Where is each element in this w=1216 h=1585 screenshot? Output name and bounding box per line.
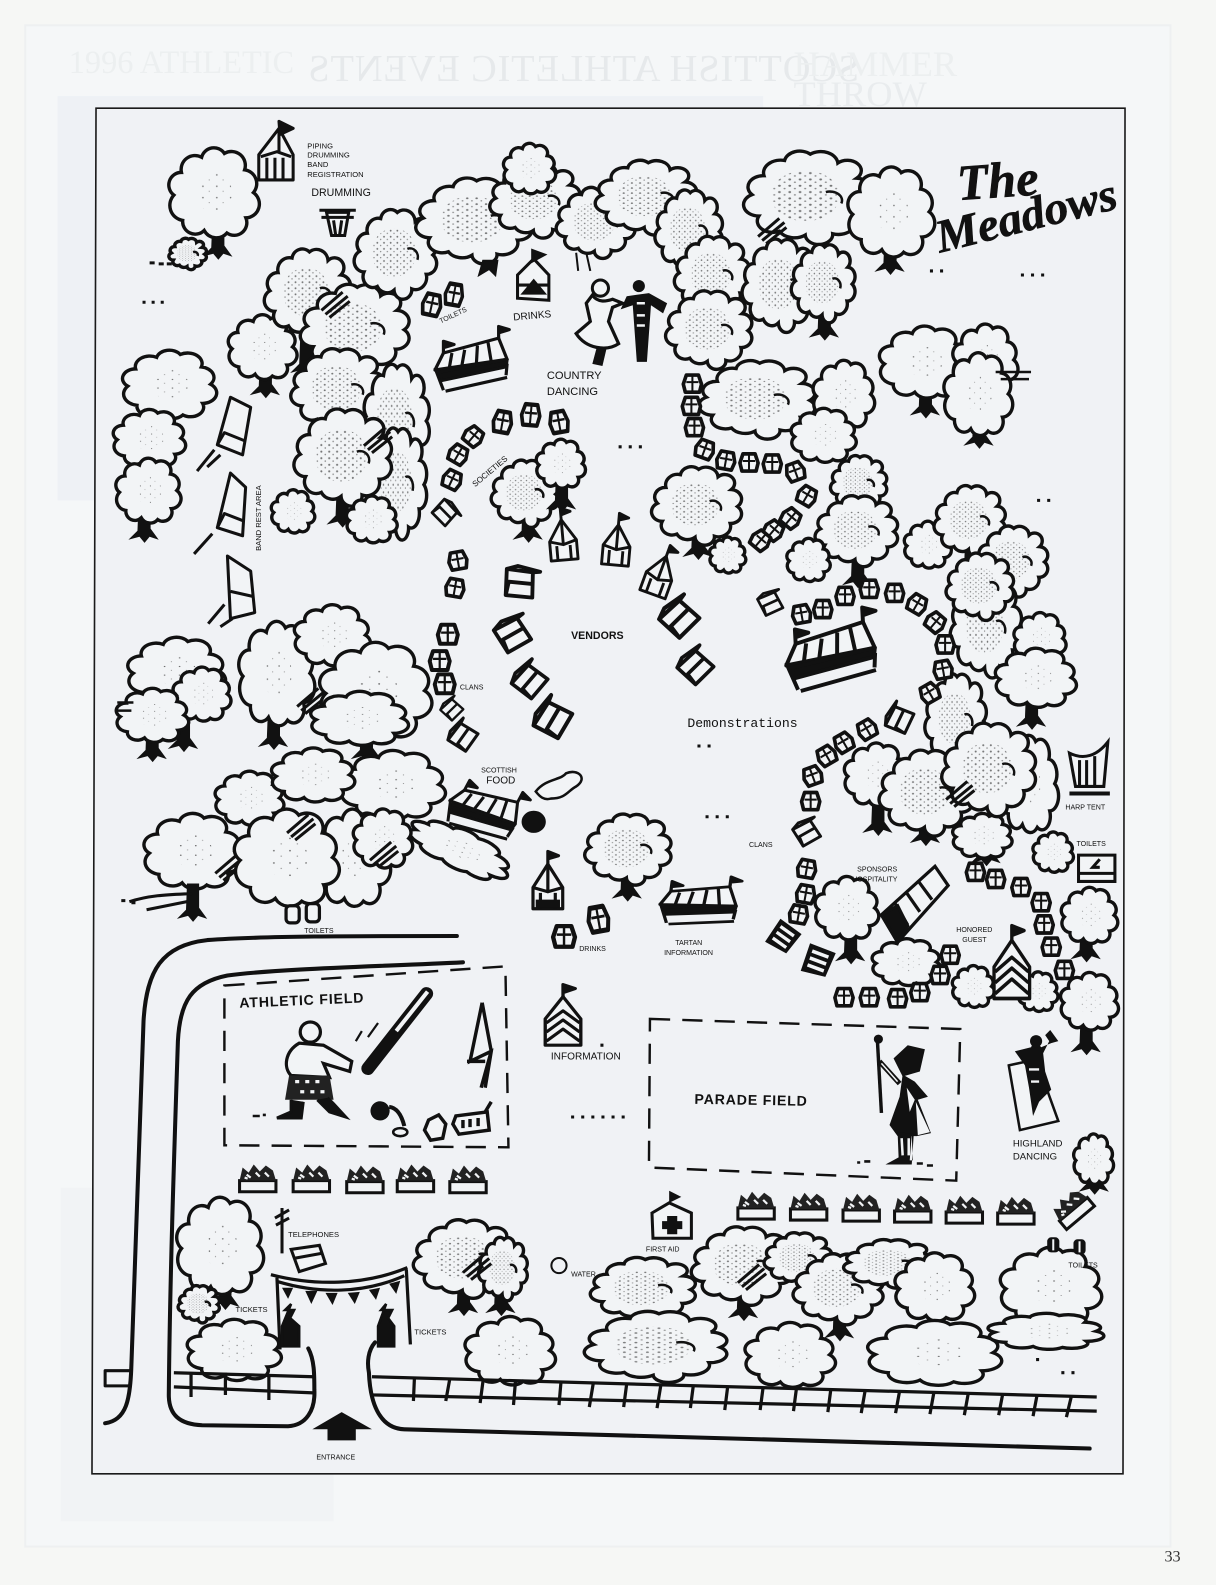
figure: piper — [857, 1035, 933, 1165]
labels: BAND REST AREA — [254, 484, 263, 551]
labels: INFORMATION — [551, 1051, 621, 1062]
labels: PIPING — [307, 142, 333, 151]
labels: DRINKS — [579, 946, 606, 953]
booths: clans west — [430, 625, 482, 756]
trees: north-west — [143, 148, 259, 302]
parade field boundary — [649, 1019, 960, 1181]
booths: north-east arc — [682, 375, 819, 553]
ticket booth: left — [282, 1304, 299, 1346]
booths: inner arc — [757, 580, 954, 810]
labels: ENTRANCE — [316, 1455, 356, 1462]
labels: ATHLETIC FIELD — [239, 989, 365, 1011]
labels: TICKETS — [414, 1327, 446, 1336]
show-through heading: reversed print: HAMMER — [793, 44, 958, 84]
map title: The — [955, 150, 1040, 211]
vendor tents — [493, 507, 717, 745]
tent: east stage — [783, 607, 879, 692]
tent: drinks south — [533, 851, 610, 947]
labels: HIGHLAND — [1013, 1138, 1062, 1149]
map title: Meadows — [929, 169, 1122, 264]
fence — [174, 1373, 1097, 1417]
trees: south-west cluster — [116, 605, 518, 922]
labels: Demonstrations — [687, 716, 798, 731]
food stands: west row — [240, 1164, 486, 1193]
labels: DANCING — [547, 386, 598, 398]
labels: HOSPITALITY — [852, 876, 898, 883]
labels: WATER — [571, 1272, 596, 1279]
trees: south-east ring — [787, 456, 1119, 1195]
icon: piping tent — [259, 121, 293, 180]
trees: central — [491, 439, 746, 902]
entrance arrow — [312, 1412, 372, 1440]
labels: BAND — [307, 160, 329, 169]
labels: PARADE FIELD — [694, 1091, 808, 1109]
labels: TICKETS — [236, 1305, 268, 1314]
labels: HONORED — [956, 927, 992, 934]
food stands: east row — [738, 1185, 1094, 1229]
labels: VENDORS — [571, 630, 624, 642]
labels: HARP TENT — [1065, 805, 1106, 812]
tent: scottish food — [440, 764, 532, 852]
show-through heading: reversed print: 1996 ATHLETIC — [69, 44, 294, 80]
labels: DRINKS — [513, 309, 552, 323]
icon: toilets north — [421, 283, 464, 317]
labels: SOCIETIES — [471, 454, 510, 489]
athletic field boundary — [224, 966, 508, 1147]
trees: south row — [177, 1197, 1104, 1387]
labels: GUEST — [962, 937, 987, 944]
labels: INFORMATION — [664, 950, 713, 957]
tent: honored guest — [994, 926, 1030, 999]
labels: DANCING — [1013, 1151, 1057, 1162]
roads — [105, 936, 1090, 1449]
labels: DRUMMING — [311, 187, 371, 199]
trees: east pair — [879, 324, 1031, 449]
labels: REGISTRATION — [307, 170, 364, 179]
labels: TOILETS — [304, 928, 334, 935]
labels: CLANS — [749, 842, 773, 849]
toilets: south-east — [1047, 1237, 1086, 1254]
icon: harp tent — [1069, 742, 1110, 794]
booths: clans east — [765, 817, 841, 983]
icon: water — [551, 1258, 567, 1273]
labels: FOOD — [486, 775, 515, 786]
map frame — [92, 108, 1125, 1474]
figure: caber tosser — [253, 992, 428, 1118]
trees: north arc — [228, 143, 935, 543]
booths: south-east ring — [835, 863, 1073, 1007]
labels: FIRST AID — [646, 1246, 680, 1253]
labels: SPONSORS — [857, 866, 897, 873]
toilets: west — [286, 904, 319, 923]
labels: TARTAN — [675, 940, 702, 947]
icon: hammer post — [467, 1003, 491, 1088]
entrance arch with bunting — [271, 1268, 410, 1349]
trees: west column — [113, 350, 217, 543]
icon: drinks tent — [518, 251, 549, 300]
labels: COUNTRY — [547, 370, 602, 382]
labels: TOILETS — [1077, 841, 1106, 848]
icon: drum — [319, 210, 356, 236]
icon: information tent — [545, 985, 581, 1045]
labels — [236, 142, 1106, 1462]
show-through heading: reversed print: SCOTTISH ATHLETIC EVENTS — [308, 48, 859, 90]
booths: societies arc — [429, 404, 570, 598]
figure: country dancers — [576, 280, 667, 366]
labels: TELEPHONES — [288, 1230, 339, 1239]
icon: toilets east — [1079, 855, 1115, 881]
icon: weight and ring — [370, 1101, 407, 1136]
smoke and cauldron — [522, 772, 582, 833]
icon: field tents — [425, 1102, 491, 1140]
icon: band rest tents — [194, 397, 255, 627]
tent: tartan information — [657, 868, 742, 933]
icon: first aid — [652, 1191, 691, 1238]
ticket booth: right — [378, 1304, 394, 1346]
labels: SCOTTISH — [481, 767, 517, 774]
figure: highland dancer — [1009, 1030, 1058, 1130]
show-through heading: reversed print: THROW — [793, 74, 928, 114]
labels: DRUMMING — [307, 151, 350, 160]
tent: north stage — [435, 326, 509, 391]
page number: 33 — [1164, 1549, 1181, 1566]
labels: TOILETS — [439, 306, 468, 325]
tent: sponsors hospitality — [881, 866, 948, 942]
icon: telephones — [275, 1208, 325, 1272]
labels: TOILETS — [1068, 1263, 1098, 1270]
path dots — [571, 271, 1075, 1373]
show-through heading: reversed print — [69, 44, 958, 114]
labels: CLANS — [460, 684, 484, 691]
